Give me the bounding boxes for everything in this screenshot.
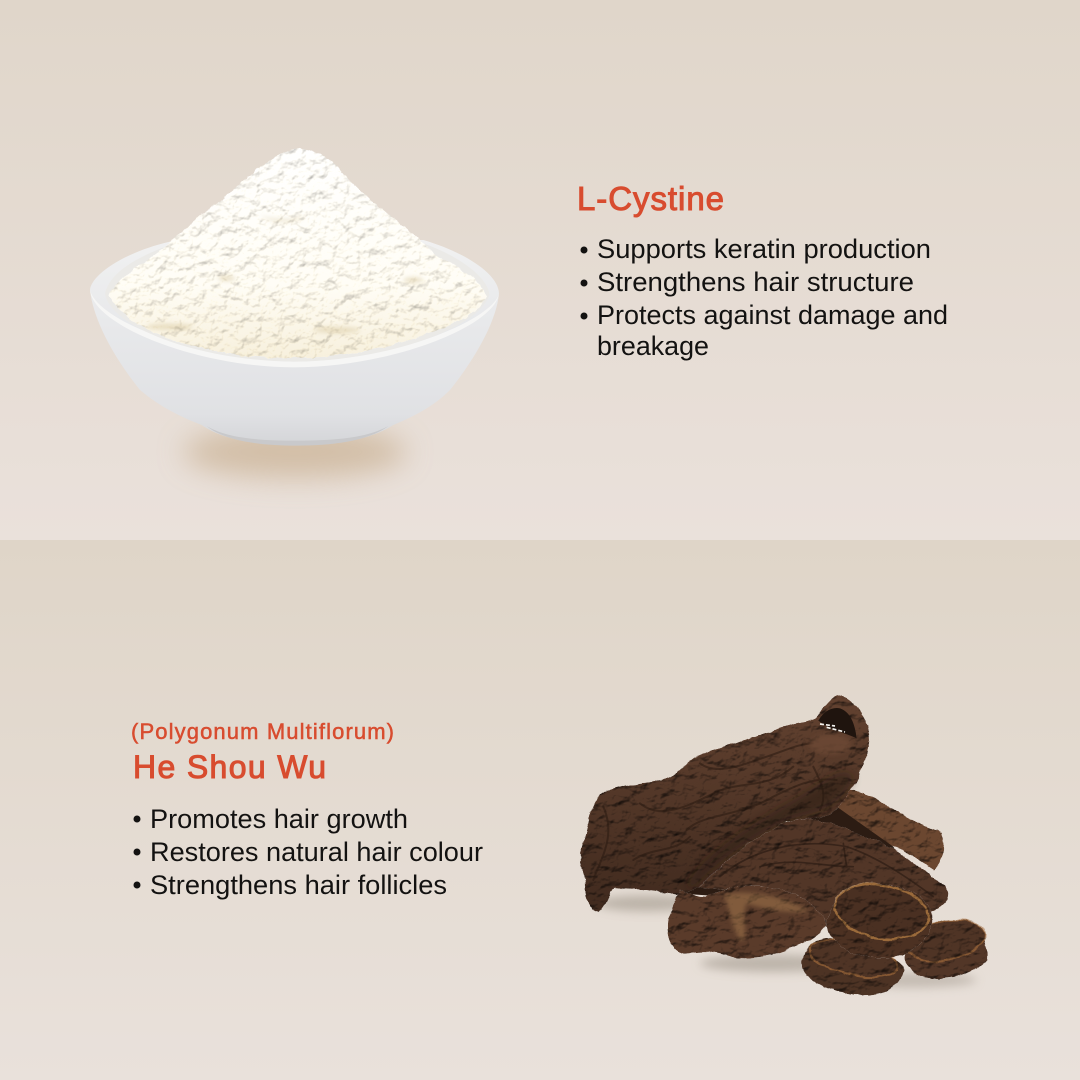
wrinkles on middle root xyxy=(720,843,933,897)
text: protects against damage and breakage xyxy=(597,300,948,361)
back root xyxy=(830,790,944,870)
slice: right xyxy=(904,914,989,979)
bullet list: L-Cystine benefits xyxy=(580,234,948,361)
icon: dried He Shou Wu roots and slices xyxy=(580,695,989,995)
text: supports keratin production: Supports keratin production xyxy=(597,234,931,264)
shade beneath large root xyxy=(687,772,853,887)
panel: He Shou Wu xyxy=(0,540,1080,1080)
heading: He Shou Wu: He Shou Wu xyxy=(133,749,326,785)
subheading: Polygonum Multiflorum: (Polygonum Multiflorum) xyxy=(131,719,394,744)
wrinkles on large root xyxy=(593,743,837,880)
root hollow at tip xyxy=(818,708,857,738)
middle root xyxy=(700,819,948,922)
slice: top xyxy=(827,877,933,958)
large root xyxy=(580,695,870,912)
heading: L-Cystine: L-Cystine xyxy=(577,180,724,217)
text: protects against damage and breakage: breakage xyxy=(597,331,709,361)
icon: bowl of white powder xyxy=(90,148,499,478)
text: strengthens hair structure: Strengthens hair structure xyxy=(597,267,914,297)
slice: left xyxy=(802,933,903,995)
text: promotes hair growth: Promotes hair growth xyxy=(150,804,408,834)
panel: L-Cystine xyxy=(0,0,1080,540)
text: restores natural hair colour: Restores natural hair colour xyxy=(150,837,483,867)
lower root xyxy=(667,886,827,959)
powder clump shadows xyxy=(147,215,423,333)
bullet list: He Shou Wu benefits xyxy=(134,804,483,900)
root knob xyxy=(809,734,851,754)
dark underlay closing gaps between roots xyxy=(677,807,927,927)
text: strengthens hair follicles: Strengthens hair follicles xyxy=(150,870,447,900)
text: protects against damage and breakage: Protects against damage and xyxy=(597,300,948,330)
lighter fibres on lower root xyxy=(723,893,810,942)
